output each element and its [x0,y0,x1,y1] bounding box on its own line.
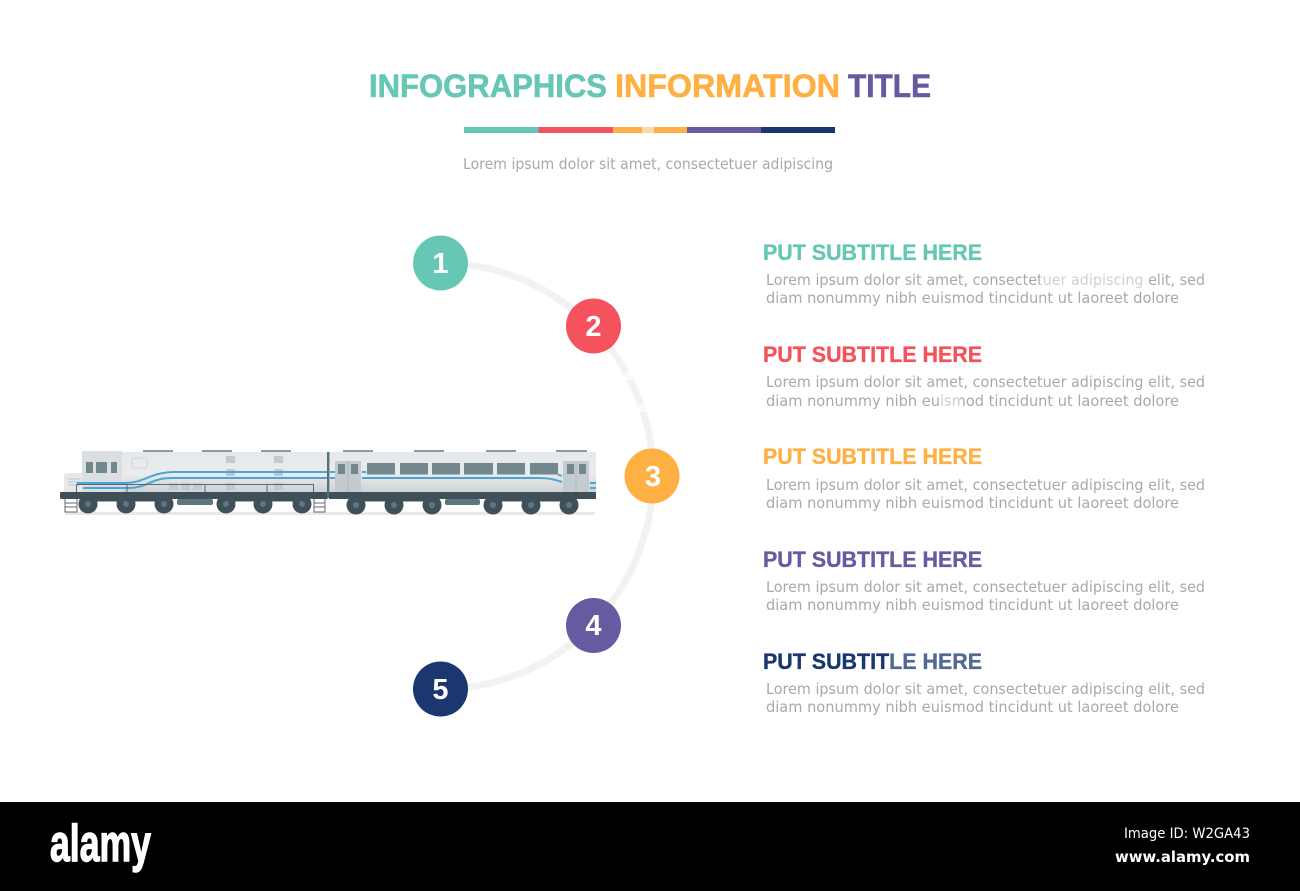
step 4 marker: 4 [585,610,602,642]
alamy logo: alamy [50,815,151,873]
step 2 marker: 2 [585,311,602,343]
footer bar [0,802,1300,891]
text block 3: diam nonummy nibh euismod tincidunt ut laoreet dolore [766,494,1179,512]
text block 5: Lorem ipsum dolor sit amet, consectetuer adipiscing elit, sed [766,680,1205,698]
text block 5 [763,649,1205,716]
header [369,68,931,173]
text block 4: Lorem ipsum dolor sit amet, consectetuer adipiscing elit, sed [766,578,1205,596]
image id: Image ID: W2GA43 [1124,826,1250,842]
text block 2: Lorem ipsum dolor sit amet, consectetuer adipiscing elit, sed [766,373,1205,391]
text block 3: PUT SUBTITLE HERE [763,444,982,469]
step 2 marker [566,298,621,354]
text block 1: PUT SUBTITLE HERE [763,240,982,265]
website: www.alamy.com [1115,848,1250,866]
text block 5: diam nonummy nibh euismod tincidunt ut laoreet dolore [766,698,1179,716]
text block 2 [763,342,1205,410]
text block 4 [763,547,1205,614]
text block 1 [763,240,1205,307]
title: INFOGRAPHICS [369,68,607,104]
text block 1: diam nonummy nibh euismod tincidunt ut laoreet dolore [766,289,1179,307]
step 3 marker [624,448,680,504]
coupling [327,452,330,498]
header tagline: Lorem ipsum dolor sit amet, consectetuer adipiscing [463,155,833,173]
text block 2: PUT SUBTITLE HERE [763,342,982,367]
passenger carriage [330,450,596,493]
locomotive underframe and wheels [60,492,328,514]
step 5 marker [413,662,468,716]
step 5 marker: 5 [432,674,449,706]
title: INFORMATION [615,68,840,104]
title [369,68,931,104]
colour rule [464,127,835,133]
carriage underframe and wheels [329,492,596,514]
text block 3 [763,444,1205,512]
timeline arc [440,263,653,689]
step 3 marker: 3 [645,461,661,493]
title: TITLE [848,68,931,104]
step 4 marker [566,598,621,653]
text block 4: PUT SUBTITLE HERE [763,547,982,572]
icon: train [60,450,596,515]
text block 5: PUT SUBTITLE HERE [763,649,982,674]
text block 3: Lorem ipsum dolor sit amet, consectetuer adipiscing elit, sed [766,476,1205,494]
text block 4: diam nonummy nibh euismod tincidunt ut laoreet dolore [766,596,1179,614]
locomotive body [64,450,328,493]
step 1 marker [413,236,468,290]
faint watermark over text and arc [625,272,1145,672]
ground shadow [65,512,595,515]
step 1 marker: 1 [432,248,449,280]
text block 2: diam nonummy nibh euismod tincidunt ut laoreet dolore [766,392,1179,410]
text block 1: Lorem ipsum dolor sit amet, consectetuer adipiscing elit, sed [766,271,1205,289]
